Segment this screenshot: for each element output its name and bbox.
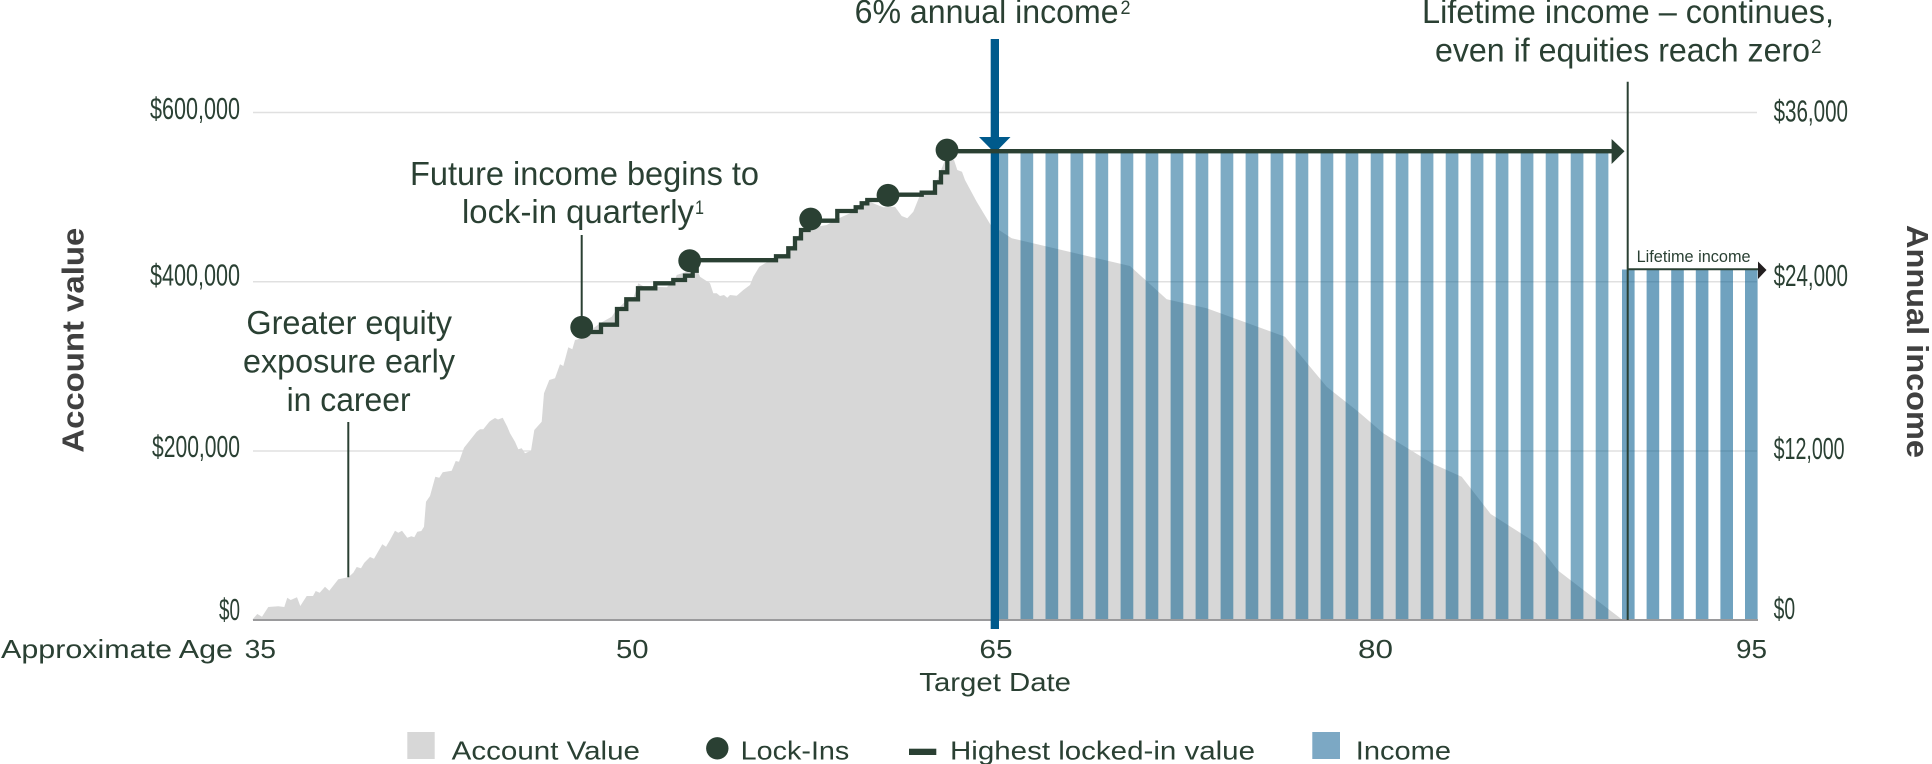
lifetime income bar label: Lifetime income [1637, 247, 1751, 266]
6% income arrow [979, 39, 1010, 629]
x axis labels: 50 [616, 634, 649, 664]
left axis title: Account value [56, 228, 90, 453]
lifetime income bars [1622, 270, 1758, 620]
lifetime income arrow [1627, 262, 1766, 279]
right axis labels: $0 [1774, 591, 1795, 626]
callout leader: lock-in [581, 235, 583, 320]
callout: future income locks in [410, 156, 759, 231]
x axis baseline [253, 619, 1758, 621]
callout: future income locks in: 1 [695, 198, 704, 219]
callout leader: equity exposure [347, 422, 349, 577]
left axis labels: $600,000 [150, 91, 240, 126]
callout leader: lifetime income [1627, 82, 1629, 620]
x axis labels: 65 [979, 634, 1013, 664]
lock-in markers [570, 139, 958, 339]
left axis labels: $0 [219, 592, 240, 627]
target date label: Target Date [919, 667, 1071, 697]
callout: future income locks in: lock-in quarterly [462, 194, 694, 231]
legend: income [1312, 732, 1451, 764]
right axis labels [1774, 94, 1848, 626]
x axis labels: 80 [1358, 634, 1393, 664]
callout: greater equity exposure: Greater equity [246, 305, 452, 342]
lock-in income arrow [947, 139, 1624, 164]
left axis labels [150, 91, 240, 627]
account value area [253, 160, 1625, 620]
callout: lifetime income continues: even if equities reach zero [1435, 33, 1810, 70]
callout: future income locks in: Future income begins to [410, 156, 759, 193]
x axis labels: Approximate Age [1, 634, 233, 664]
income bars to lock-in horizon [996, 152, 1608, 620]
legend: lock-ins [706, 735, 849, 764]
x axis labels [1, 634, 1767, 664]
gridlines [253, 112, 1757, 451]
left axis labels: $200,000 [152, 429, 240, 464]
legend [407, 732, 1451, 764]
right axis labels: $36,000 [1774, 94, 1848, 129]
callout: lifetime income continues: 2 [1811, 37, 1822, 58]
callout: lifetime income continues [1422, 0, 1834, 70]
callout: greater equity exposure: in career [287, 382, 411, 419]
x axis labels: 95 [1736, 634, 1767, 664]
left axis labels: $400,000 [150, 258, 240, 293]
legend: account value [407, 732, 640, 764]
callout: greater equity exposure: exposure early [243, 344, 455, 381]
callout: greater equity exposure [243, 305, 455, 419]
highest locked-in value stepped line [582, 150, 947, 332]
right axis labels: $12,000 [1774, 431, 1845, 466]
x axis labels: 35 [245, 634, 276, 664]
right axis labels: $24,000 [1774, 258, 1848, 293]
